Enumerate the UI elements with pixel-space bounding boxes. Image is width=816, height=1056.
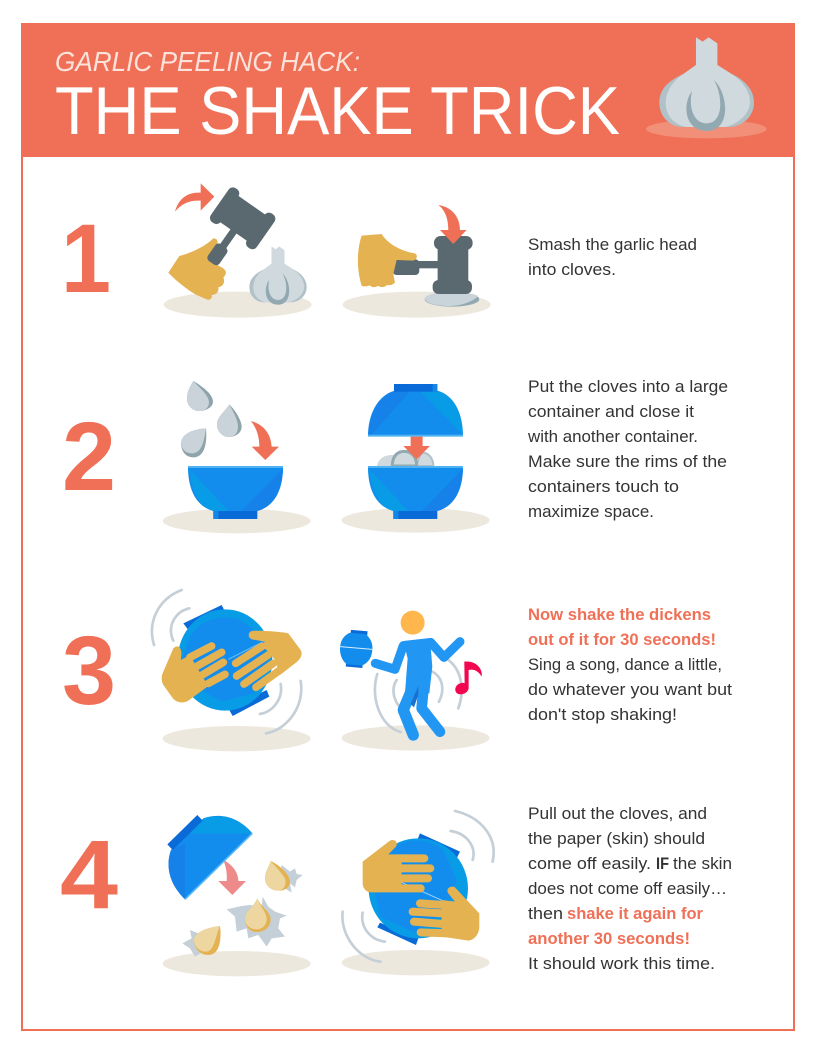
number 2: 2 <box>62 402 116 511</box>
illustration: smashing garlic flat <box>343 205 491 318</box>
instruction text 3: out of it for 30 seconds! <box>528 630 716 649</box>
instruction text 3: do whatever you want but <box>528 680 732 699</box>
number 3: 3 <box>62 616 116 725</box>
instruction text 4: It should work this time. <box>528 954 715 973</box>
instruction text 3: don't stop shaking! <box>528 705 677 724</box>
instruction text 2: with another container. <box>527 427 698 446</box>
illustration: closing bowl over cloves <box>342 384 490 533</box>
instruction text 2: containers touch to <box>528 477 679 496</box>
instruction text 4: IF <box>656 854 669 873</box>
instruction text 4: the paper (skin) should <box>528 829 705 848</box>
instruction text 4: the skin <box>673 854 732 873</box>
subtitle: GARLIC PEELING HACK: <box>55 46 360 77</box>
instruction text 4: come off easily. <box>528 854 651 873</box>
instruction text 4: Pull out the cloves, and <box>528 804 707 823</box>
right hand <box>413 887 479 941</box>
title: THE SHAKE TRICK <box>55 73 620 149</box>
instruction text 4: does not come off easily… <box>528 879 727 898</box>
instruction text 1 <box>528 235 697 279</box>
instruction text 2: container and close it <box>528 402 694 421</box>
instruction text 2 <box>527 377 728 521</box>
number 4: 4 <box>60 820 118 929</box>
instruction text 3: Now shake the dickens <box>528 605 711 624</box>
number 1: 1 <box>61 204 111 313</box>
illustration: hands shaking container <box>152 590 311 751</box>
icon: garlic head <box>646 37 767 138</box>
instruction text 4: then <box>528 904 563 923</box>
header banner <box>22 23 795 157</box>
instruction text 2: Put the cloves into a large <box>528 377 728 396</box>
illustration: person dancing with container <box>338 611 490 751</box>
instruction text 3: Sing a song, dance a little, <box>528 655 722 674</box>
instruction text 4: another 30 seconds! <box>528 929 690 948</box>
illustration: raising hammer over garlic <box>164 183 312 318</box>
instruction text 2: Make sure the rims of the <box>528 452 727 471</box>
left hand <box>162 646 225 702</box>
instruction text 2: maximize space. <box>528 502 654 521</box>
illustration: cloves dropping into bowl <box>163 381 311 533</box>
instruction text 3 <box>528 605 732 724</box>
instruction text 4: shake it again for <box>567 904 703 923</box>
step 2 row <box>62 377 728 533</box>
illustration: hands shaking container again <box>342 811 494 975</box>
step 3 row <box>62 590 732 751</box>
illustration: pouring out peeled cloves <box>163 815 311 976</box>
instruction text 1: Smash the garlic head <box>528 235 697 254</box>
instruction text 1: into cloves. <box>528 260 616 279</box>
step 4 row <box>60 804 732 976</box>
left hand <box>363 840 430 892</box>
step 1 row <box>61 183 697 318</box>
instruction text 4 <box>528 804 732 973</box>
right hand <box>236 631 302 687</box>
